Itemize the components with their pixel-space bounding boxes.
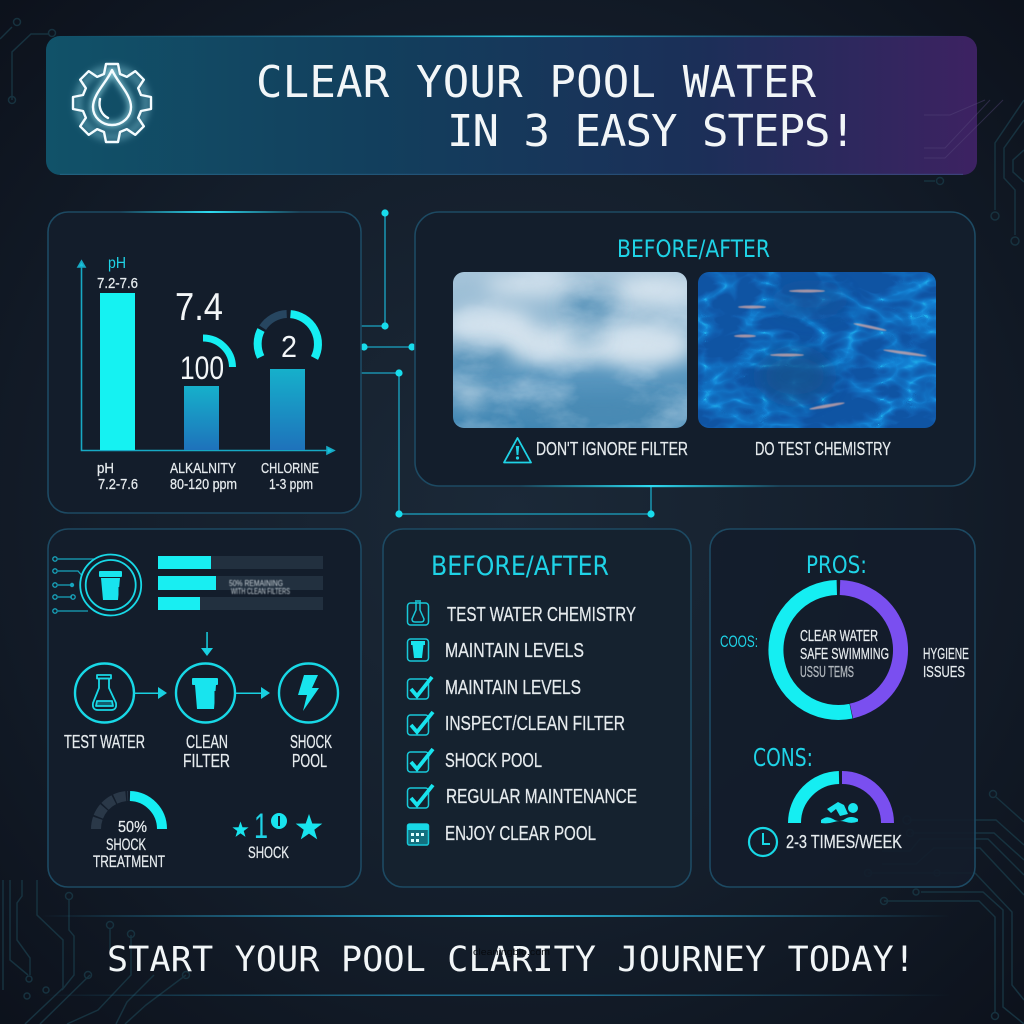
caption: do: DO TEST CHEMISTRY [755,439,891,459]
axis labels: ALKALNITY [170,461,236,477]
bar caption: 50% REMAINING [229,579,283,588]
bar: chlorine [270,369,305,450]
bar: alkalinity [184,386,219,450]
donut text: CLEAR WATER [800,628,878,645]
axis labels: pH [97,461,114,477]
heading: cons: CONS: [753,743,813,772]
step labels: SHOCK [290,732,332,752]
image: clear water [698,272,936,428]
progress bars [158,556,323,610]
row text: enjoy clear pool: ENJOY CLEAR POOL [445,822,596,845]
step labels [64,732,332,771]
axis labels: 1-3 ppm [269,477,313,493]
icon: calendar [408,824,428,845]
icon: filter box [408,639,428,661]
panel: checklist [383,529,691,887]
row text: shock pool: SHOCK POOL [445,749,542,772]
icon: check [408,785,433,808]
value: 7.4: 7.4 [175,286,223,329]
icon: shock bolt [279,664,338,722]
arrow: down [201,632,213,656]
donut chart [776,588,901,712]
arrow: test to filter [134,687,167,699]
gauge: shock treatment [96,796,162,829]
title: IN 3 EASY STEPS! [447,106,856,157]
axis labels [97,461,319,493]
axis labels: 7.2-7.6 [98,477,138,493]
icon: clean filter [176,664,235,722]
label: hygiene issues: HYGIENE [923,646,969,663]
axis labels: CHLORINE [261,461,319,477]
row text: regular maintenance: REGULAR MAINTENANCE [446,785,637,808]
image: cloudy water [442,272,695,428]
label: pH top: pH [108,255,126,272]
icon: gear with water drop [73,64,151,142]
panel: pros and cons [710,529,975,887]
label: coos: COOS: [720,633,758,651]
step labels: POOL [292,751,327,771]
footer call to action: START YOUR POOL CLARITY JOURNEY TODAY! [107,940,915,980]
icon: swimmer [821,802,858,823]
title: CLEAR YOUR POOL WATER [256,57,816,108]
step labels: TEST WATER [64,732,145,752]
gauge label: SHOCK [106,836,146,854]
donut text: SAFE SWIMMING [800,646,889,663]
label: pH top: 7.2-7.6 [97,276,138,292]
panel: water chemistry chart [48,211,361,513]
value: 1: 1 [254,807,268,846]
panel: three step process [48,529,361,887]
row text: inspect filter: INSPECT/CLEAN FILTER [445,712,625,735]
bar caption [229,579,290,596]
watermark: cleaningblo.com [473,947,550,958]
label: hygiene issues [923,646,969,681]
heading: BEFORE/AFTER [617,235,770,263]
panel: before and after photos [415,212,975,487]
arrow: filter to shock [236,687,270,699]
bar: pH [100,293,135,450]
gauge: chlorine ring [258,314,318,358]
half gauge [794,778,888,823]
heading: BEFORE/AFTER [431,551,609,582]
label: shock: SHOCK [248,844,289,862]
icon: flask box [408,601,428,625]
bar chart axes [78,261,334,454]
gauge label: TREATMENT [93,853,165,871]
caption: don't: DON'T IGNORE FILTER [536,439,688,459]
gauge label [93,819,165,871]
footer rules [40,915,950,917]
icon: check [408,712,433,735]
label: hygiene issues: ISSUES [923,664,965,681]
header banner [46,36,1003,175]
donut text [800,628,889,681]
bar caption: WITH CLEAN FILTERS [231,587,290,596]
icon: badge [271,813,287,829]
label: pH top [97,255,138,292]
value: 100: 100 [180,350,224,386]
axis labels: 80-120 ppm [170,477,237,493]
donut text: USSU TEMS [800,664,854,681]
icon: test water flask [75,664,134,722]
icon: warning triangle [504,438,531,462]
row text: maintain levels: MAINTAIN LEVELS [445,676,581,699]
icon: small star [232,822,249,837]
title [256,57,856,157]
row text: maintain levels: MAINTAIN LEVELS [445,639,584,662]
step labels: FILTER [183,751,230,771]
icon: clock [749,828,777,856]
label: frequency: 2-3 TIMES/WEEK [786,832,902,852]
icon: check [408,677,432,699]
connector lines [360,209,655,518]
row text: test water chemistry: TEST WATER CHEMISTRY [447,603,636,626]
value: 2: 2 [281,329,297,364]
icon: filter with circuit lines [53,554,141,616]
icon: large star [296,814,322,839]
gauge label: 50% [118,819,147,836]
icon: check [408,749,433,772]
step labels: CLEAN [186,732,228,752]
traces inside header [924,100,1003,158]
gauge: alkalinity arc [203,338,232,367]
heading: pros: PROS: [806,551,867,579]
